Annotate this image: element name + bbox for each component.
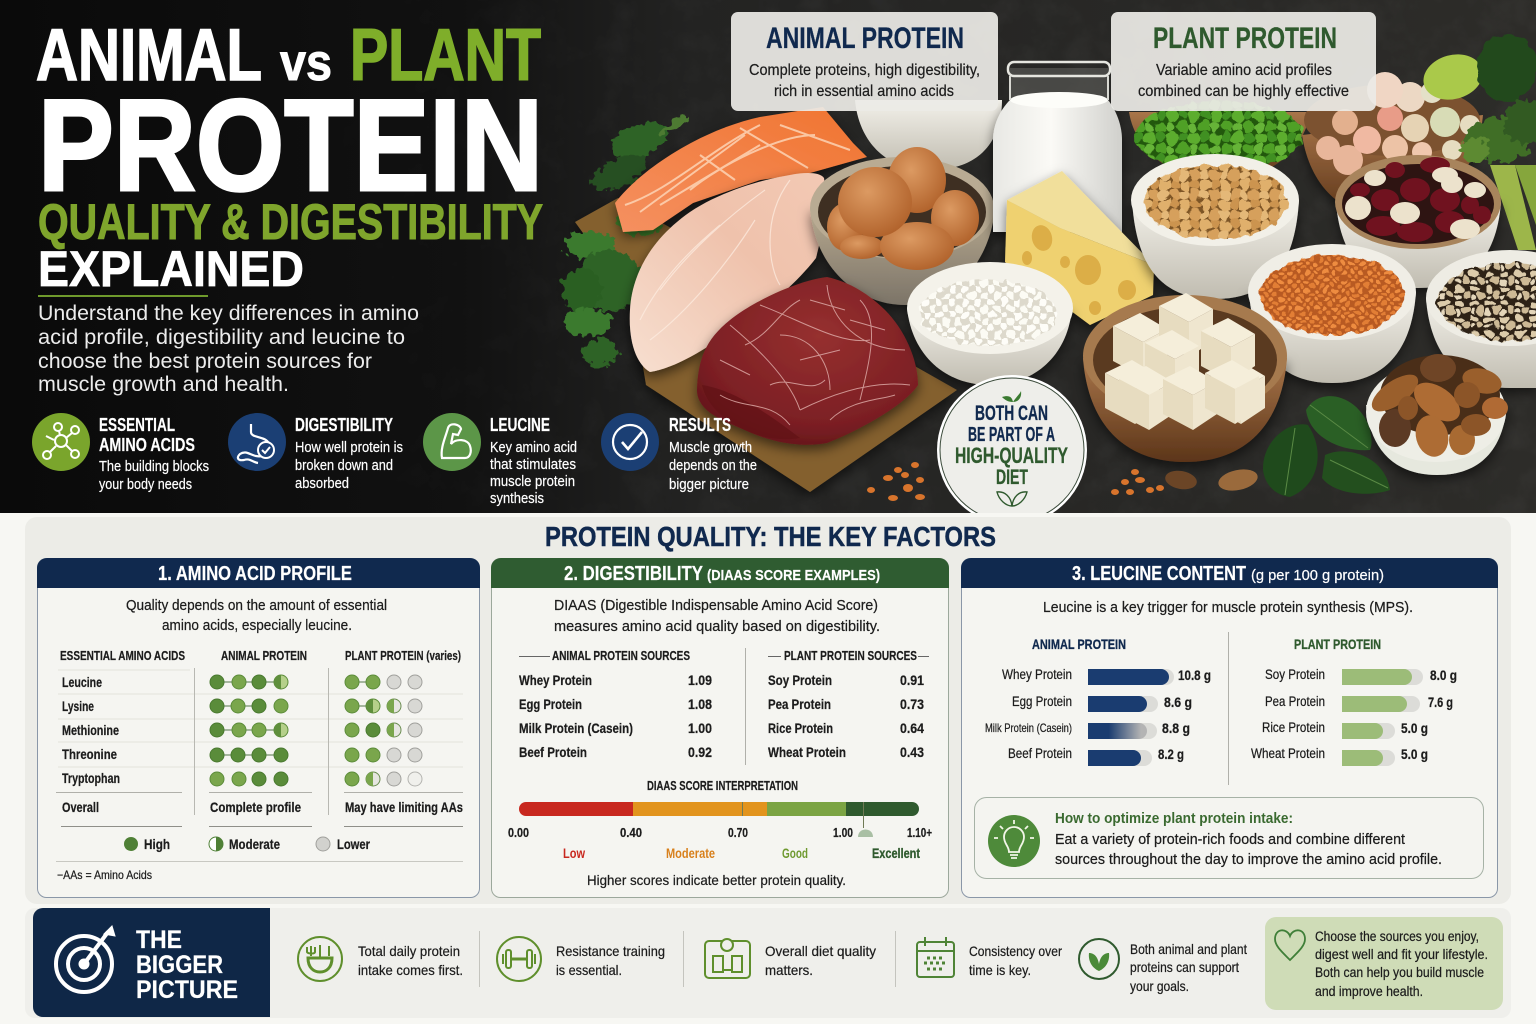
factors section background (25, 517, 1511, 904)
plant leucine bars: Pea Protein (1265, 694, 1325, 709)
animal sources table: 0.92 (688, 745, 712, 760)
icon: calendar (917, 937, 954, 977)
title: vs (280, 34, 332, 92)
title: ANIMAL (36, 15, 262, 96)
plant sources table: Rice Protein (768, 721, 833, 736)
icon: check circle (601, 413, 659, 471)
item: both proteins: your goals. (1130, 978, 1189, 994)
icon: heart (1275, 930, 1305, 960)
DIAAS scale: 0.40 (620, 826, 642, 840)
badge: both can be part of a high-quality diet: BOTH CAN (975, 402, 1048, 425)
feature: digestibility (228, 413, 403, 492)
plant leucine bars: Soy Protein (1265, 667, 1325, 682)
feature: leucine: LEUCINE (490, 415, 550, 435)
intro paragraph: muscle growth and health. (38, 372, 289, 396)
animal leucine bars: 10.8 g (1178, 667, 1211, 683)
item: consistency (917, 937, 1062, 978)
panel 3: leucine content (961, 558, 1498, 898)
parsley (562, 113, 693, 366)
icon: small leaves (1002, 391, 1021, 402)
feature: essential amino acids: ESSENTIAL (99, 415, 175, 435)
panel 1: amino acid profile (37, 558, 480, 898)
title: EXPLAINED (38, 241, 304, 297)
item: both proteins (1079, 939, 1247, 994)
animal leucine bars: 8.2 g (1158, 746, 1184, 762)
card: animal protein (731, 12, 998, 111)
plant sources table: 0.43 (900, 745, 924, 760)
plant leucine bars: Wheat Protein (1251, 746, 1325, 761)
scattered lentils and almonds (867, 462, 1260, 501)
intro paragraph: acid profile, digestibility and leucine to (38, 325, 405, 349)
milk jar (993, 62, 1122, 232)
plant sources table: 0.91 (900, 673, 924, 688)
callout: choose your sources: Both can help you build muscle (1315, 965, 1484, 980)
animal sources table: 1.08 (688, 697, 712, 712)
amino acid rows: Overall (62, 800, 99, 815)
animal sources table: Milk Protein (Casein) (519, 721, 633, 736)
plant leucine bars (1251, 637, 1457, 766)
item: both proteins: proteins can support (1130, 959, 1239, 975)
legend (124, 837, 371, 852)
intro text: amino acids, especially leucine. (162, 618, 352, 634)
feature: leucine: that stimulates (490, 456, 576, 473)
plant sources table: 0.64 (900, 721, 924, 736)
DIAAS scale (508, 779, 932, 861)
callout: optimize plant protein: Eat a variety of protein-rich foods and combine different (1055, 832, 1405, 848)
callout: choose your sources: Choose the sources you enjoy, (1315, 929, 1479, 944)
title: QUALITY & DIGESTIBILITY (38, 194, 543, 250)
feature: leucine: Key amino acid (490, 439, 577, 456)
table headers: ESSENTIAL AMINO ACIDS (60, 649, 185, 663)
panel header: 2. DIGESTIBILITY (564, 563, 704, 585)
salmon fillet (615, 107, 867, 232)
item: overall diet quality: matters. (765, 962, 813, 978)
animal sources table: 1.00 (688, 721, 712, 736)
peas bowl (1129, 99, 1306, 166)
card: plant protein (1111, 12, 1376, 111)
table headers (60, 649, 461, 663)
feature: essential amino acids: The building blocks (99, 458, 209, 475)
feature: essential amino acids: AMINO ACIDS (99, 435, 195, 455)
wooden board (575, 198, 957, 492)
plant leucine bars: Rice Protein (1262, 720, 1325, 735)
animal leucine bars: ANIMAL PROTEIN (1032, 637, 1126, 652)
animal sources table: Beef Protein (519, 745, 587, 760)
intro text: Quality depends on the amount of essential (126, 598, 387, 614)
plant sources table: Wheat Protein (768, 745, 846, 760)
animal leucine bars (985, 637, 1211, 766)
plant sources table (768, 649, 929, 760)
icon: stomach (228, 413, 286, 471)
DIAAS scale: Low (563, 846, 585, 861)
feature: results: RESULTS (669, 415, 731, 435)
panel 2: digestibility (491, 558, 949, 898)
amino acid rows: Threonine (62, 747, 117, 762)
feature: digestibility: absorbed (295, 475, 349, 492)
title (36, 15, 543, 297)
subtitle underline (38, 295, 208, 297)
item: overall diet quality: Overall diet quality (765, 943, 876, 959)
icon: light bulb (988, 815, 1040, 867)
mixed beans wood bowl (1302, 72, 1483, 217)
intro paragraph: Understand the key differences in amino (38, 301, 419, 325)
intro text: measures amino acid quality based on digestibility. (554, 619, 880, 635)
intro text: DIAAS (Digestible Indispensable Amino Acid Score) (554, 598, 878, 614)
item: overall diet quality (705, 939, 876, 978)
navy title block: BIGGER (136, 951, 223, 979)
feature: essential amino acids (32, 413, 209, 493)
callout: optimize plant protein (974, 798, 1484, 878)
animal sources table: 1.09 (688, 673, 712, 688)
feature: results: Muscle growth (669, 439, 752, 456)
title: PROTEIN (38, 72, 543, 218)
feature: leucine (423, 413, 577, 507)
section heading: PROTEIN QUALITY: THE KEY FACTORS (545, 521, 996, 552)
rating dots (210, 675, 422, 786)
item: resistance training (497, 937, 665, 981)
animal sources table: Whey Protein (519, 673, 592, 688)
panel header (37, 558, 480, 588)
plant sources table: 0.73 (900, 697, 924, 712)
animal leucine bars: Milk Protein (Casein) (985, 721, 1072, 735)
animal leucine bars: 8.8 g (1162, 720, 1190, 736)
item: consistency: Consistency over (969, 943, 1062, 959)
animal sources table: Egg Protein (519, 697, 582, 712)
panel header: 1. AMINO ACID PROFILE (158, 563, 352, 585)
item: both proteins: Both animal and plant (1130, 941, 1247, 957)
icon: sprout (997, 492, 1027, 506)
feature: digestibility: DIGESTIBILITY (295, 415, 393, 435)
panel header: (g per 100 g protein) (1251, 567, 1384, 584)
chicken breast (630, 173, 825, 372)
legend: Lower (337, 837, 371, 852)
badge: both can be part of a high-quality diet: BE PART OF A (968, 424, 1055, 446)
animal leucine bars: Whey Protein (1002, 667, 1072, 682)
animal leucine bars: 8.6 g (1164, 694, 1192, 710)
plant sources table: PLANT PROTEIN SOURCES (784, 649, 917, 663)
navy title block (33, 908, 270, 1017)
egg bowl (810, 147, 995, 305)
panel header: 3. LEUCINE CONTENT (1072, 563, 1246, 585)
broccoli and leaves (1418, 34, 1536, 250)
food photo collage (562, 34, 1536, 501)
table headers: PLANT PROTEIN (varies) (345, 649, 461, 663)
icon: leaf circle (1079, 939, 1119, 979)
feature: digestibility: broken down and (295, 457, 393, 474)
card: animal protein: ANIMAL PROTEIN (766, 22, 964, 55)
animal leucine bars: Egg Protein (1012, 694, 1072, 709)
amino acid rows: Leucine (62, 675, 102, 690)
DIAAS scale: 0.00 (508, 826, 529, 840)
intro text (126, 598, 387, 634)
amino acid rows: Lysine (62, 699, 94, 714)
plant leucine bars: PLANT PROTEIN (1294, 637, 1381, 652)
intro text (554, 598, 880, 635)
navy title block: THE (136, 926, 182, 954)
DIAAS scale: Moderate (666, 846, 715, 861)
DIAAS scale: DIAAS SCORE INTERPRETATION (647, 779, 798, 793)
bottom band: the bigger picture (25, 908, 1511, 1018)
plant sources table: Soy Protein (768, 673, 832, 688)
plant sources table: Pea Protein (768, 697, 831, 712)
top white yogurt bowl (855, 100, 1002, 170)
plant leucine bars: 5.0 g (1401, 746, 1428, 762)
spinach leaves (1263, 396, 1390, 497)
amino acid rows: Methionine (62, 723, 119, 738)
card: plant protein: Variable amino acid profiles (1156, 62, 1332, 79)
plant leucine bars: 8.0 g (1430, 667, 1457, 683)
feature: digestibility: How well protein is (295, 439, 403, 456)
icon: molecule (32, 413, 90, 471)
animal sources table: ANIMAL PROTEIN SOURCES (552, 649, 690, 663)
icon: dumbbell (497, 937, 541, 981)
card: animal protein: rich in essential amino acids (774, 83, 954, 100)
legend: Moderate (229, 837, 280, 852)
card: plant protein: PLANT PROTEIN (1153, 22, 1337, 55)
lentil bowl (1248, 244, 1416, 383)
item: resistance training: is essential. (556, 962, 622, 978)
amino acid rows: Tryptophan (62, 771, 120, 786)
DIAAS scale: 0.70 (728, 826, 748, 840)
badge: both can be part of a high-quality diet (937, 375, 1087, 525)
chickpea bowl (1131, 154, 1299, 299)
DIAAS scale: Excellent (872, 846, 920, 861)
DIAAS scale: 1.10+ (907, 826, 932, 840)
DIAAS scale: Good (782, 846, 808, 861)
footnote: −AAs = Amino Acids (57, 868, 152, 882)
intro paragraph: choose the best protein sources for (38, 349, 372, 373)
icon: target with arrow (56, 926, 115, 992)
feature: essential amino acids: your body needs (99, 476, 192, 493)
title: PLANT (350, 15, 541, 96)
panel header: (DIAAS SCORE EXAMPLES) (707, 567, 880, 584)
item: resistance training: Resistance training (556, 943, 665, 959)
feature: results: depends on the (669, 457, 757, 474)
legend: High (144, 837, 170, 852)
callout: choose your sources (1265, 917, 1503, 1010)
icon: flexed arm (423, 413, 481, 471)
badge: both can be part of a high-quality diet: DIET (996, 466, 1028, 489)
intro paragraph (38, 301, 419, 396)
nuts bowl (1366, 354, 1508, 475)
cottage cheese bowl (907, 262, 1073, 385)
item: total daily protein (298, 937, 463, 981)
icon: bowl (298, 937, 342, 981)
panel header (491, 558, 949, 588)
plant leucine bars: 7.6 g (1428, 694, 1453, 710)
cheese wedge (1005, 171, 1154, 325)
item: consistency: time is key. (969, 962, 1031, 978)
feature: results: bigger picture (669, 476, 749, 493)
feature: leucine: synthesis (490, 490, 544, 507)
DIAAS scale: 1.00 (833, 826, 853, 840)
scale bar (519, 802, 919, 828)
plant leucine bars: 5.0 g (1401, 720, 1428, 736)
card: animal protein: Complete proteins, high digestibility, (749, 62, 980, 79)
badge: both can be part of a high-quality diet: HIGH-QUALITY (955, 443, 1068, 468)
feature: leucine: muscle protein (490, 473, 575, 490)
amino acid rows (62, 675, 463, 815)
animal sources table (519, 649, 712, 760)
amino acid rows: May have limiting AAs (345, 800, 463, 815)
table headers: ANIMAL PROTEIN (221, 649, 307, 663)
icon: scale with book (705, 939, 750, 978)
item: total daily protein: intake comes first. (358, 962, 463, 978)
hero banner (0, 0, 1536, 525)
quinoa bowl (1426, 250, 1536, 388)
scale note: Higher scores indicate better protein quality. (587, 872, 846, 888)
card: plant protein: combined can be highly effective (1138, 83, 1349, 100)
callout: choose your sources: and improve health. (1315, 984, 1423, 999)
callout: choose your sources: digest well and fit your lifestyle. (1315, 947, 1488, 962)
navy title block: PICTURE (136, 976, 238, 1004)
callout: optimize plant protein: How to optimize plant protein intake: (1055, 811, 1293, 827)
animal leucine bars: Beef Protein (1008, 746, 1072, 761)
item: total daily protein: Total daily protein (358, 943, 460, 959)
amino acid rows: Complete profile (210, 800, 301, 815)
feature: results (601, 413, 757, 493)
callout: optimize plant protein: sources throughout the day to improve the amino acid profile. (1055, 852, 1442, 868)
kidney bean bowl (1335, 155, 1501, 288)
beef steak (697, 277, 918, 445)
intro text: Leucine is a key trigger for muscle protein synthesis (MPS). (1043, 599, 1413, 616)
tofu bowl (1083, 293, 1287, 462)
panel header (961, 558, 1498, 588)
